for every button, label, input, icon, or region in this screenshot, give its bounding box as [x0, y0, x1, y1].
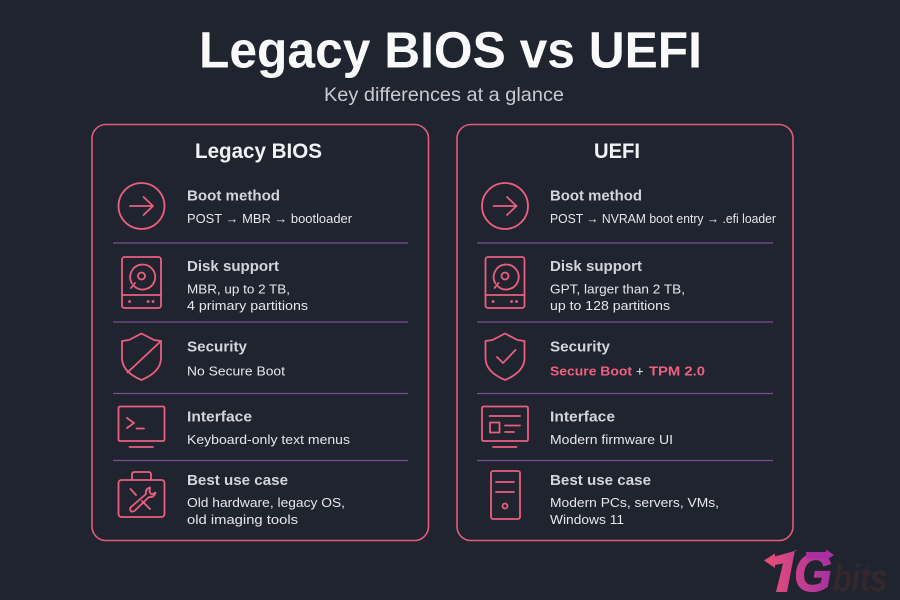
best use case text: Windows 11: [550, 512, 624, 527]
disk support text: MBR, up to 2 TB,: [187, 282, 290, 296]
interface text: [187, 408, 351, 447]
icon: firmware UI monitor: [482, 406, 528, 447]
best use case text: Old hardware, legacy OS,: [187, 495, 345, 510]
security text: +: [636, 364, 644, 378]
interface text: Keyboard-only text menus: [187, 432, 351, 447]
best use case text: old imaging tools: [187, 512, 299, 527]
interface text: Modern firmware UI: [550, 432, 673, 447]
panel heading: Legacy BIOS: Legacy BIOS: [195, 140, 322, 163]
panel: Legacy BIOS: [92, 124, 428, 540]
interface text: Interface: [550, 408, 615, 426]
security text: No Secure Boot: [187, 364, 285, 378]
icon: hard disk: [122, 257, 161, 308]
best use case text: Best use case: [187, 472, 288, 489]
boot method text: POST → MBR → bootloader: [187, 211, 353, 226]
icon: shield with slash: [122, 334, 161, 380]
disk support text: GPT, larger than 2 TB,: [550, 282, 685, 296]
security text: [550, 338, 705, 378]
security text: Secure Boot: [550, 364, 633, 378]
interface text: [550, 408, 673, 447]
best use case text: [550, 472, 719, 527]
icon: shield with check: [486, 334, 524, 380]
security text: Security: [187, 338, 248, 356]
disk support text: [187, 258, 309, 313]
boot method text: Boot method: [550, 188, 642, 204]
best use case text: Best use case: [550, 472, 651, 489]
icon: PC tower: [491, 471, 520, 519]
interface text: Interface: [187, 408, 252, 426]
icon: toolbox with wrench: [118, 472, 164, 517]
boot method text: POST → NVRAM boot entry → .efi loader: [550, 211, 777, 226]
boot method text: [187, 188, 353, 226]
icon: arrow in circle: [482, 183, 528, 229]
panel heading: UEFI: UEFI: [594, 140, 640, 163]
logo: 1Gbits: bits: [833, 558, 887, 600]
security text: [187, 338, 285, 378]
disk support text: [550, 258, 685, 313]
panel: UEFI: [457, 124, 793, 540]
disk support text: Disk support: [187, 258, 279, 275]
disk support text: 4 primary partitions: [187, 298, 309, 313]
logo: 1Gbits: [764, 543, 887, 600]
security text: TPM 2.0: [649, 364, 705, 378]
security text: Security: [550, 338, 611, 356]
icon: hard disk: [486, 257, 524, 308]
subtitle: Key differences at a glance: [324, 84, 564, 106]
disk support text: Disk support: [550, 258, 642, 275]
icon: arrow in circle: [118, 183, 164, 229]
title: Legacy BIOS vs UEFI: [199, 22, 702, 78]
best use case text: Modern PCs, servers, VMs,: [550, 495, 719, 510]
boot method text: [550, 188, 777, 226]
icon: terminal monitor: [118, 406, 164, 447]
boot method text: Boot method: [187, 188, 280, 204]
disk support text: up to 128 partitions: [550, 298, 671, 313]
best use case text: [187, 472, 345, 527]
